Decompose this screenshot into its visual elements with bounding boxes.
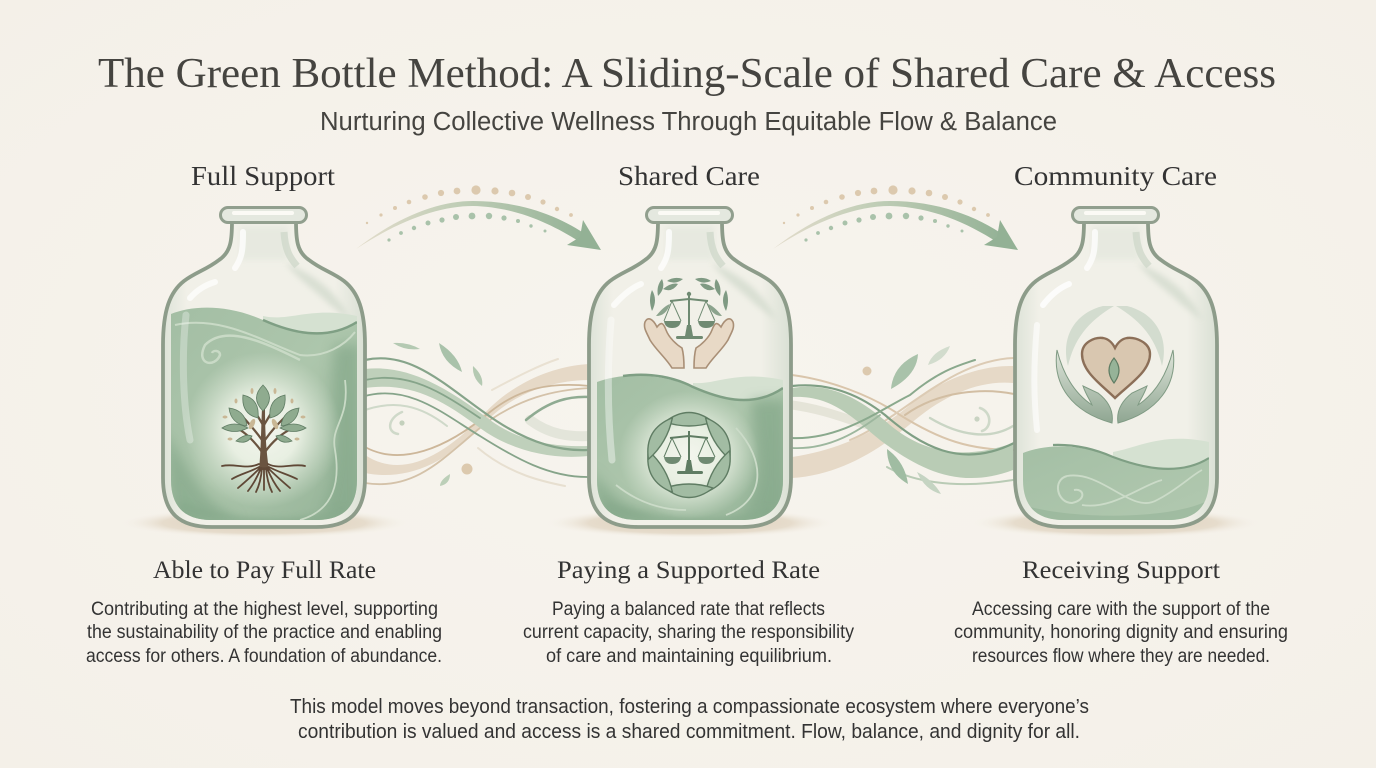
description: access for others. A foundation of abundance. bbox=[86, 646, 442, 667]
arrow: shared care to community care bbox=[773, 185, 1018, 250]
closing statement: contribution is valued and access is a shared commitment. Flow, balance, and dignity for all. bbox=[298, 721, 1080, 743]
description: Contributing at the highest level, supporting bbox=[91, 599, 438, 620]
arrow: full support to shared care bbox=[356, 185, 601, 250]
icon: tree of life bbox=[222, 385, 306, 492]
description: resources flow where they are needed. bbox=[972, 646, 1270, 667]
description bbox=[523, 599, 854, 667]
bottle: full support bbox=[163, 208, 365, 527]
icon: scales with hands and laurel bbox=[644, 278, 734, 368]
ground shadow: middle bottle bbox=[545, 508, 835, 538]
description: Accessing care with the support of the bbox=[972, 599, 1270, 620]
description: community, honoring dignity and ensuring bbox=[954, 622, 1288, 643]
subtitle: Nurturing Collective Wellness Through Equitable Flow & Balance bbox=[320, 108, 1057, 136]
closing statement: This model moves beyond transaction, fostering a compassionate ecosystem where everyone’s bbox=[290, 696, 1089, 718]
description bbox=[954, 599, 1288, 667]
bottle: shared care bbox=[589, 208, 791, 527]
column: receiving support bbox=[954, 555, 1288, 667]
description: of care and maintaining equilibrium. bbox=[546, 646, 832, 667]
heading: Shared Care: Shared Care bbox=[618, 160, 760, 191]
description bbox=[86, 599, 442, 667]
icon: wreath and scales bbox=[640, 412, 738, 498]
subheading: Receiving Support bbox=[1022, 555, 1220, 584]
description: the sustainability of the practice and enabling bbox=[87, 622, 442, 643]
column: paying a supported rate bbox=[523, 555, 854, 667]
ribbon flow: right bbox=[792, 346, 1014, 494]
title: The Green Bottle Method: A Sliding-Scale of Shared Care & Access bbox=[98, 50, 1276, 97]
description: Paying a balanced rate that reflects bbox=[552, 599, 825, 620]
ribbon flow: left bbox=[365, 343, 590, 486]
ground shadow: left bottle bbox=[119, 508, 409, 538]
heading: Full Support: Full Support bbox=[191, 160, 335, 191]
subheading: Able to Pay Full Rate bbox=[153, 555, 376, 584]
description: current capacity, sharing the responsibility bbox=[523, 622, 854, 643]
heading: Community Care: Community Care bbox=[1014, 160, 1217, 191]
liquid: low level bbox=[1023, 439, 1209, 525]
liquid: mid level bbox=[591, 375, 786, 525]
bottle: community care bbox=[1015, 208, 1217, 527]
icon: heart held by hands bbox=[1056, 306, 1174, 423]
ground shadow: right bottle bbox=[971, 508, 1261, 538]
closing statement bbox=[290, 696, 1089, 743]
liquid: high level bbox=[165, 308, 360, 525]
subheading: Paying a Supported Rate bbox=[557, 555, 820, 584]
column: able to pay full rate bbox=[86, 555, 442, 667]
